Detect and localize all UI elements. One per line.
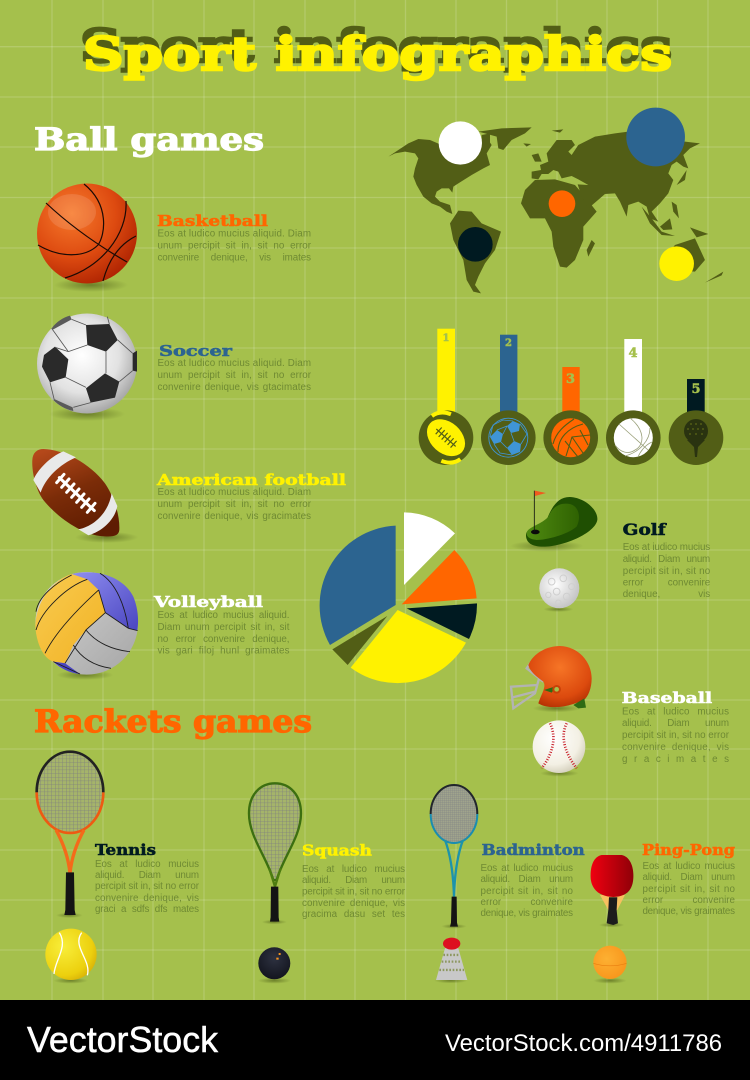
text: basketball: unum percipit sit in, sit no error <box>158 240 312 252</box>
text: squash: percipit sit in, sit no error <box>302 886 406 898</box>
label: baseball: Baseball <box>622 689 713 707</box>
bar 1: american football: 1 <box>443 333 449 344</box>
text: tennis: convenire denique, vis <box>95 893 199 904</box>
text: squash: convenire denique, vis <box>302 898 405 909</box>
text: soccer: Eos at ludico mucius aliquid. Diam <box>158 358 311 369</box>
icon: ping-pong paddle <box>591 855 633 927</box>
bar 5: golf <box>669 379 723 465</box>
text: baseball <box>622 706 730 765</box>
text: soccer <box>158 358 312 393</box>
label: american football: American football <box>156 471 346 489</box>
text: volleyball: Eos at ludico mucius aliquid. <box>158 610 290 621</box>
icon: golf green <box>510 491 597 552</box>
label: soccer: Soccer <box>159 342 233 360</box>
continents <box>388 127 723 293</box>
text: golf <box>623 542 711 600</box>
title: Sport infographics <box>80 19 672 73</box>
text: squash <box>302 864 406 920</box>
icon: tennis racket <box>37 752 103 918</box>
text: badminton: aliquid. Diam unum <box>480 874 573 885</box>
text: basketball: Eos at ludico mucius aliquid. Diam <box>158 228 311 240</box>
heading: ball games: Ball games <box>34 122 264 158</box>
text: volleyball <box>158 610 290 656</box>
text: tennis: percipit sit in, sit no error <box>95 881 200 892</box>
text: golf: vis <box>698 589 710 600</box>
label: squash: Squash <box>302 842 372 860</box>
icon: golf ball <box>539 568 579 612</box>
icon: basketball <box>37 184 137 292</box>
bar 4: basketball <box>606 339 661 465</box>
text: american football: convenire denique, vis gracimates <box>158 511 311 522</box>
text: baseball: aliquid. Diam unum <box>622 718 729 729</box>
bar 5: golf: 5 <box>691 382 701 397</box>
text: baseball: g r a c i m a t e s <box>622 754 729 765</box>
text: baseball: convenire denique, vis <box>622 742 729 753</box>
map marker: yellow <box>659 246 694 281</box>
text: tennis <box>95 859 200 915</box>
icon: shuttlecock <box>434 938 467 983</box>
text: golf: error <box>623 578 644 588</box>
text: squash: aliquid. Diam unum <box>302 875 405 886</box>
text: badminton <box>480 863 574 919</box>
brand name: VectorStock <box>27 1019 219 1060</box>
world map <box>388 108 723 293</box>
icon: american football <box>32 449 138 543</box>
text: tennis: graci a sdfs dfs mates <box>95 904 199 915</box>
icon: squash ball <box>258 947 291 984</box>
text: basketball: convenire denique, vis imates <box>158 252 311 264</box>
text: ping-pong: denique, vis graimates <box>642 906 735 917</box>
text: volleyball: no error convenire denique, <box>158 634 290 645</box>
text: badminton: error <box>480 897 502 908</box>
ranking chart <box>414 329 723 470</box>
icon: soccer ball <box>37 314 137 421</box>
text: volleyball: vis gari filoj hunl graimates <box>158 646 290 656</box>
bar 2: soccer <box>481 335 536 465</box>
text: volleyball: Diam unum percipit sit in, sit <box>158 622 290 633</box>
footer bar <box>0 1000 750 1080</box>
bar 3: volleyball <box>543 367 598 465</box>
text: golf: aliquid. Diam unum <box>623 554 710 565</box>
icon: baseball <box>533 720 585 777</box>
text: golf: convenire <box>668 578 711 588</box>
bar 4: basketball: 4 <box>628 346 638 361</box>
icon: tennis ball <box>45 929 97 984</box>
text: badminton: denique, vis graimates <box>480 908 573 919</box>
text: golf: Eos at iudico mucius <box>623 542 710 553</box>
text: badminton: Eos at ludico mucius <box>480 863 573 874</box>
text: ping-pong: aliquid. Diam unum <box>642 872 735 883</box>
text: golf: denique, <box>623 589 660 600</box>
text: ping-pong: error <box>642 895 664 906</box>
icon: badminton racket <box>431 785 477 929</box>
text: ping-pong: Eos at ludico mucius <box>642 861 735 872</box>
label: badminton: Badminton <box>482 841 585 859</box>
map marker: white <box>439 121 482 165</box>
text: soccer: convenire denique, vis gtacimates <box>158 382 311 393</box>
map marker: dark <box>458 227 493 262</box>
text: american football <box>158 487 312 522</box>
label: volleyball: Volleyball <box>153 593 263 611</box>
text: baseball: percipit sit in, sit no error <box>622 730 730 741</box>
bar 2: soccer: 2 <box>505 338 512 349</box>
icon: helmet <box>511 646 592 712</box>
text: ping-pong <box>642 861 736 917</box>
icon: squash racket <box>249 783 301 924</box>
map marker: blue <box>626 108 685 166</box>
text: american football: unum percipit sit in, sit no error <box>158 499 312 510</box>
text: golf: percipit sit in, sit no <box>623 566 711 577</box>
text: ping-pong: convenire <box>693 895 736 906</box>
text: squash: Eos at ludico mucius <box>302 864 405 875</box>
text: soccer: unum percipit sit in, sit no error <box>158 370 312 381</box>
text: badminton: convenire <box>531 897 574 908</box>
text: american football: Eos at ludico mucius aliquid. Diam <box>158 487 311 498</box>
icon: ping-pong ball <box>593 946 627 984</box>
text: squash: gracima dasu set tes <box>302 909 405 920</box>
label: ping-pong: Ping-Pong <box>642 841 736 859</box>
title: Sport infographics <box>83 27 672 81</box>
text: baseball: Eos at ludico mucius <box>622 706 729 718</box>
bar 3: volleyball: 3 <box>566 372 575 387</box>
label: basketball: Basketball <box>157 212 268 230</box>
text: tennis: Eos at ludico mucius <box>95 859 199 870</box>
text: tennis: aliquid. Diam unum <box>95 870 199 881</box>
label: tennis: Tennis <box>95 841 156 859</box>
text: badminton: percipit sit in, sit no <box>480 886 574 897</box>
bar 1: american football <box>414 329 478 470</box>
image id: VectorStock.com/4911786 <box>445 1030 722 1057</box>
text: basketball <box>158 228 312 264</box>
text: ping-pong: percipit sit in, sit no <box>642 884 736 895</box>
map marker: orange <box>549 190 575 217</box>
pie chart <box>320 512 477 683</box>
label: golf: Golf <box>623 520 667 539</box>
icon: volleyball <box>35 572 138 680</box>
heading: rackets games: Rackets games <box>34 704 312 740</box>
